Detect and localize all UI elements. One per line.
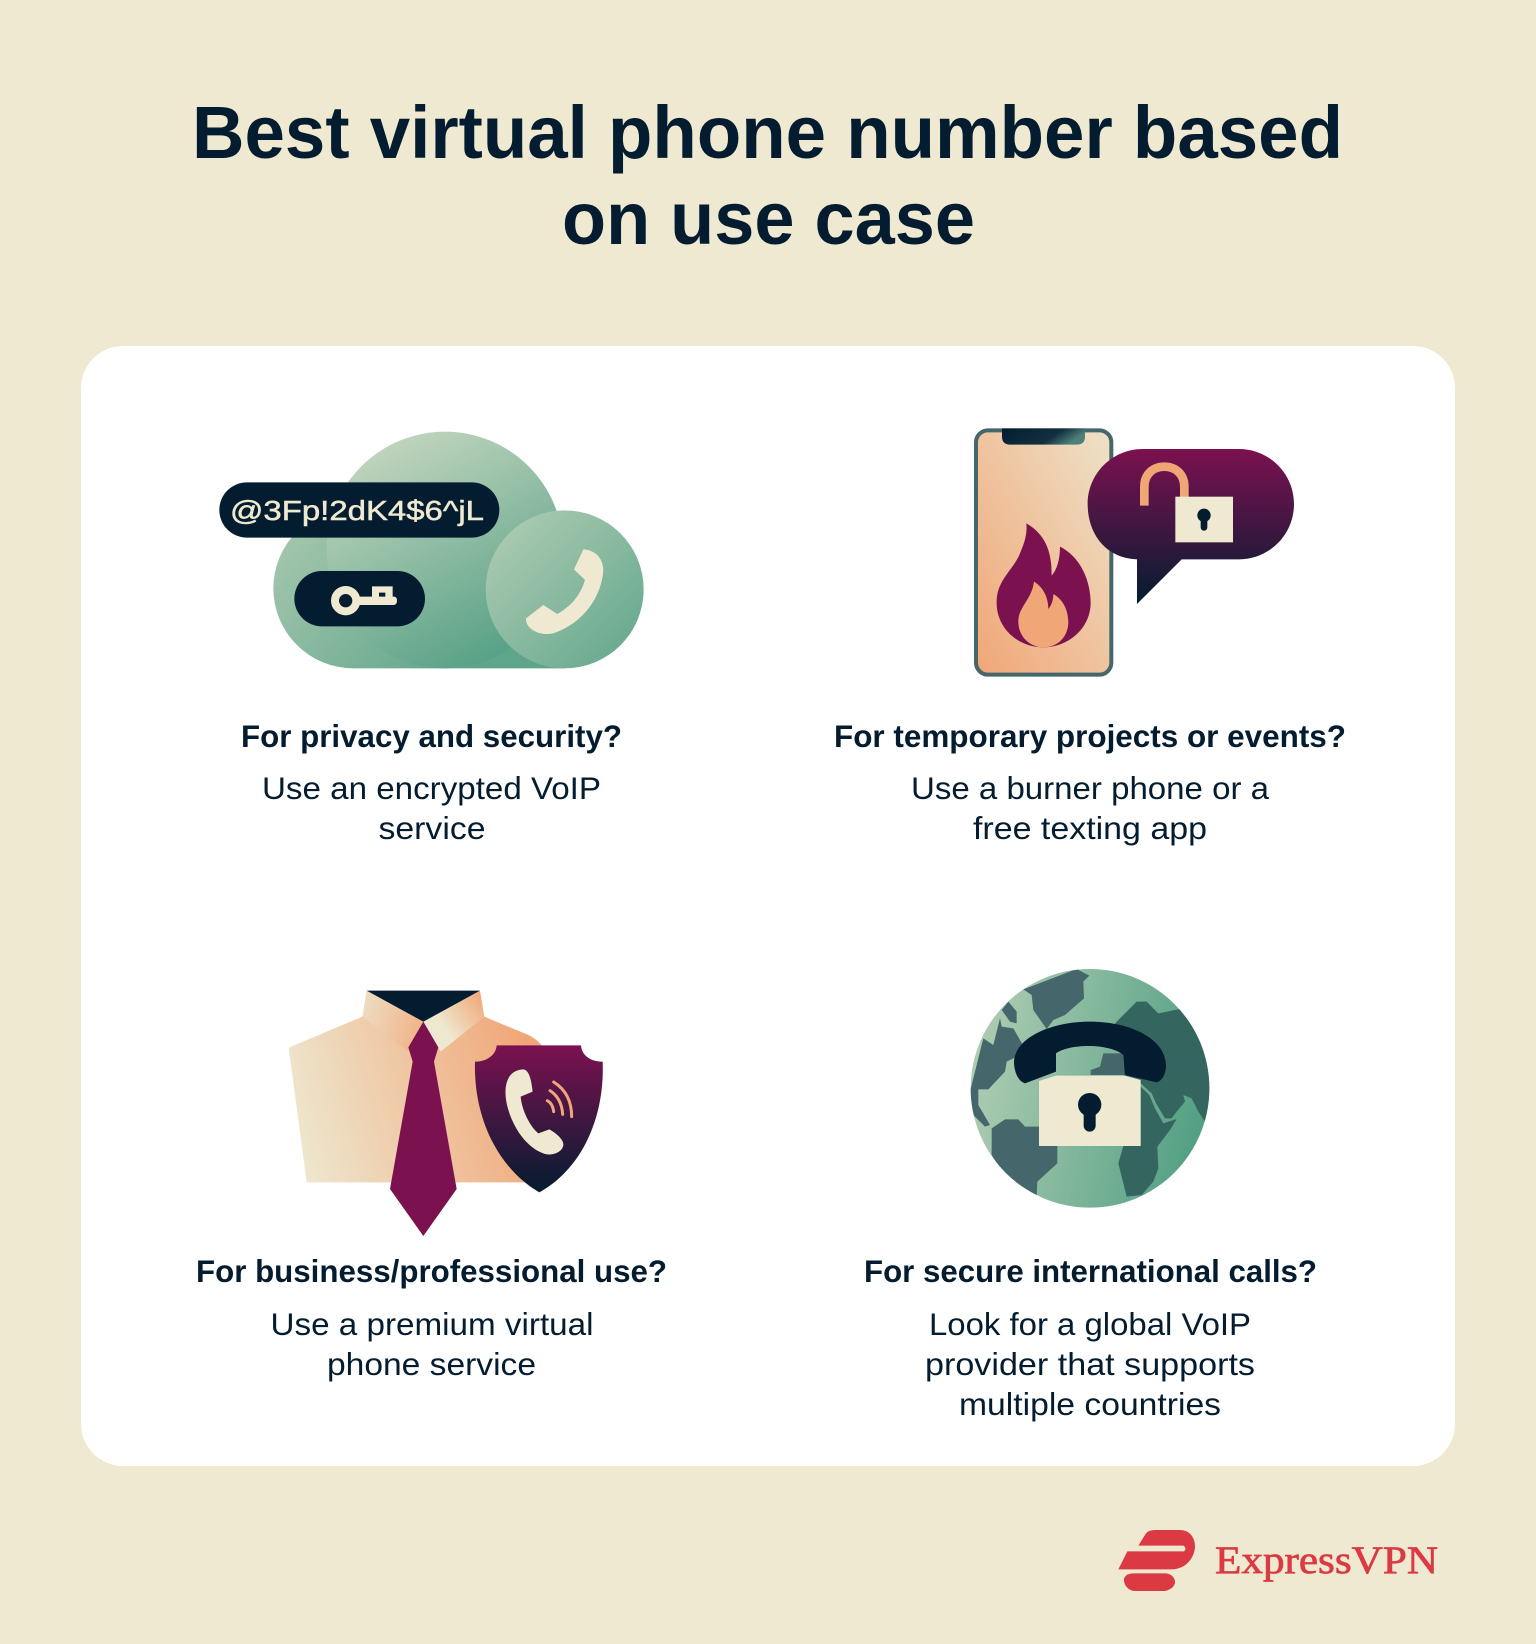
- password pill: @3Fp!2dK4$6^jL: [230, 495, 484, 526]
- body text: international: Look for a global VoIP: [929, 1306, 1251, 1342]
- padlock body: [1039, 1076, 1141, 1146]
- body text: international: multiple countries: [959, 1386, 1221, 1422]
- heading: business: For business/professional use?: [196, 1253, 667, 1289]
- speech bubble: [1088, 449, 1294, 604]
- icon: logo mark: [1118, 1530, 1195, 1591]
- panel: business use: [196, 991, 667, 1382]
- handset: [1014, 1022, 1166, 1083]
- title: [192, 91, 1343, 260]
- flame: [997, 523, 1091, 647]
- body text: temporary: Use a burner phone or a: [911, 770, 1269, 806]
- ExpressVPN logo: [1118, 1530, 1438, 1591]
- tie: [390, 1022, 457, 1236]
- shield with phone: [475, 1045, 603, 1192]
- body text: privacy: service: [378, 810, 486, 846]
- title: Best virtual phone number based: [192, 91, 1343, 174]
- icon: globe with phone padlock: [967, 965, 1213, 1212]
- body text: international: provider that supports: [925, 1346, 1255, 1382]
- phone: [976, 428, 1111, 675]
- icon: cloud with password and phone: [219, 432, 644, 668]
- body text: temporary: [911, 770, 1269, 846]
- white card panel: [81, 346, 1455, 1466]
- panel: international calls: [864, 965, 1317, 1422]
- body text: business: phone service: [327, 1346, 536, 1382]
- icon: shirt, tie and shield: [289, 991, 603, 1236]
- heading: international: For secure international calls?: [864, 1253, 1317, 1289]
- shirt: [289, 991, 542, 1182]
- heading: temporary: For temporary projects or events?: [834, 718, 1346, 754]
- body text: privacy: Use an encrypted VoIP: [262, 770, 601, 806]
- phone circle with handset: [486, 510, 644, 668]
- key pill: [294, 571, 425, 626]
- open padlock: [1144, 467, 1233, 542]
- password pill: [219, 482, 499, 538]
- cloud shape: [273, 432, 565, 668]
- body text: international: [925, 1306, 1255, 1422]
- panel: temporary projects: [834, 428, 1346, 846]
- wordmark: ExpressVPN: [1215, 1539, 1438, 1582]
- title: on use case: [562, 177, 975, 260]
- icon: burner phone with unlocked speech bubble: [976, 428, 1294, 675]
- globe: [967, 965, 1213, 1212]
- heading: privacy: For privacy and security?: [241, 718, 622, 754]
- body text: business: [270, 1306, 594, 1382]
- body text: business: Use a premium virtual: [270, 1306, 594, 1342]
- panel: privacy and security: [219, 432, 644, 846]
- body text: temporary: free texting app: [973, 810, 1207, 846]
- keyhole: [1078, 1093, 1101, 1132]
- body text: privacy: [262, 770, 601, 846]
